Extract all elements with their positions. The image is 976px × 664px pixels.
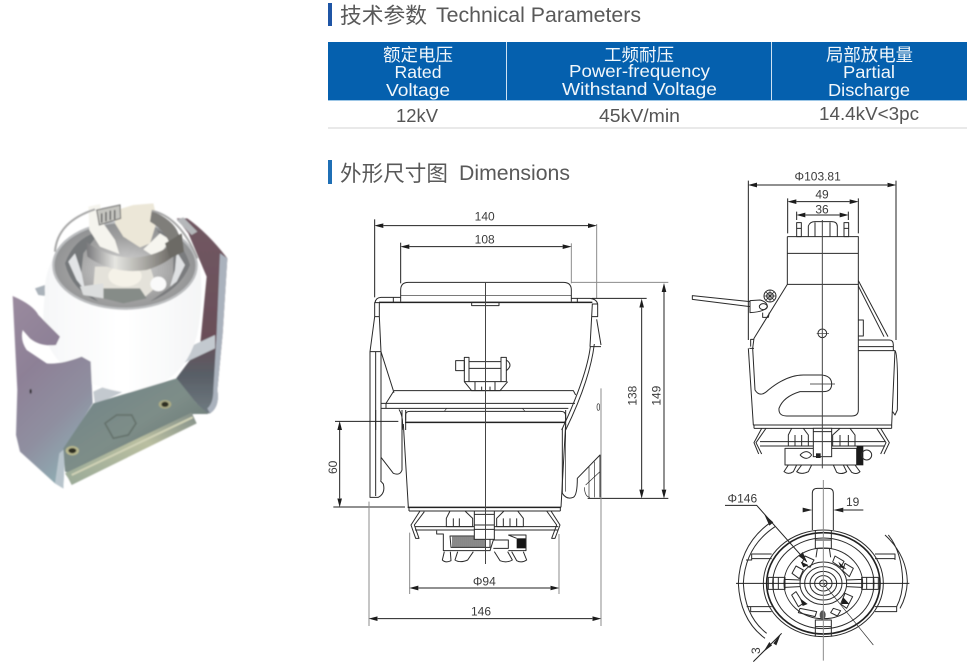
dimension 36 [797,202,848,220]
dimension 60 [326,421,405,507]
dimension phi 146: Φ146 [728,492,757,506]
leader [823,583,873,645]
dimension phi 94 [410,533,559,594]
wire bail [55,209,197,258]
parameters table [328,42,967,129]
body outline [748,237,898,425]
dimension 19 [803,495,863,512]
dimension 3: 3 [749,647,763,654]
column: power-frequency withstand voltage: 工频耐压 [604,45,674,65]
rear cross bar [35,285,50,297]
clevis bracket [456,357,510,391]
white ceramic fins [88,204,119,254]
table values [396,104,919,126]
dimension 146 [369,388,601,626]
column: rated voltage: 额定电压 [383,45,453,65]
drawing: front view [326,210,668,626]
dimension phi 103.81 [748,170,896,340]
column: partial discharge [826,45,913,100]
axes [736,582,909,585]
base rail [65,413,197,485]
side center line [821,220,824,468]
column: partial discharge: Discharge [828,80,910,100]
dimension 138: 138 [626,385,640,406]
column: power-frequency withstand voltage: Power-frequency [569,61,710,81]
dimension 108: 108 [475,232,495,246]
column: power-frequency withstand voltage: Withstand Voltage [562,79,717,99]
table header band [328,42,967,100]
hose clamp ring [86,233,183,271]
spring coil [453,537,485,547]
dimension 60: 60 [326,460,340,474]
heading: technical parameters [328,3,641,28]
drawing: side view [692,170,898,474]
heading: technical parameters: 技术参数 [340,4,427,28]
column: partial discharge: 局部放电量 [826,45,913,65]
front view upper outline [370,282,601,430]
column: partial discharge: Partial [843,62,895,82]
column: rated voltage [383,45,453,100]
dimension 3 [749,633,782,662]
right bracket plate [175,218,227,413]
product photo: insulated bracket assembly [13,203,227,488]
outer arcs and ears [738,522,907,638]
dimension phi 146 [725,492,807,563]
shaft [812,488,833,530]
dimension phi 94: Φ94 [473,574,496,588]
dimension phi 103.81: Φ103.81 [795,170,841,184]
white insulator body [43,220,201,392]
dimension 138 [588,298,668,498]
dimension 140: 140 [475,210,495,224]
heading: dimensions [328,160,570,186]
dimension 149: 149 [649,385,663,406]
dimension 19: 19 [846,495,860,509]
centre mark [810,329,835,384]
bottom terminal [754,425,892,474]
front view lower outline [370,410,600,562]
mounting holes [66,446,79,455]
metal cup [53,222,197,309]
terminal centre [93,267,157,298]
terminal lugs [768,530,878,637]
dimension 49: 49 [815,187,829,201]
stamped logo [105,415,136,438]
heading: dimensions: Dimensions [459,161,570,185]
base plate [63,378,208,473]
grounding wire [692,290,776,317]
dimension 36: 36 [815,202,829,216]
table values: 14.4kV<3pc [819,104,919,124]
dimension 146: 146 [471,604,491,618]
center line [484,283,486,564]
heading: dimensions: 外形尺寸图 [340,162,448,186]
table values: 45kV/min [599,106,680,126]
column: power-frequency withstand voltage [562,45,717,99]
table values: 12kV [396,106,438,126]
left bracket plate [13,296,93,488]
heading: technical parameters: Technical Parameters [436,3,641,27]
column: rated voltage: Rated [394,62,442,82]
top nut and studs [797,222,849,237]
dimension 49 [788,187,858,233]
drawing: bottom view [725,480,909,662]
column: rated voltage: Voltage [386,80,450,100]
concentric body [763,530,883,637]
